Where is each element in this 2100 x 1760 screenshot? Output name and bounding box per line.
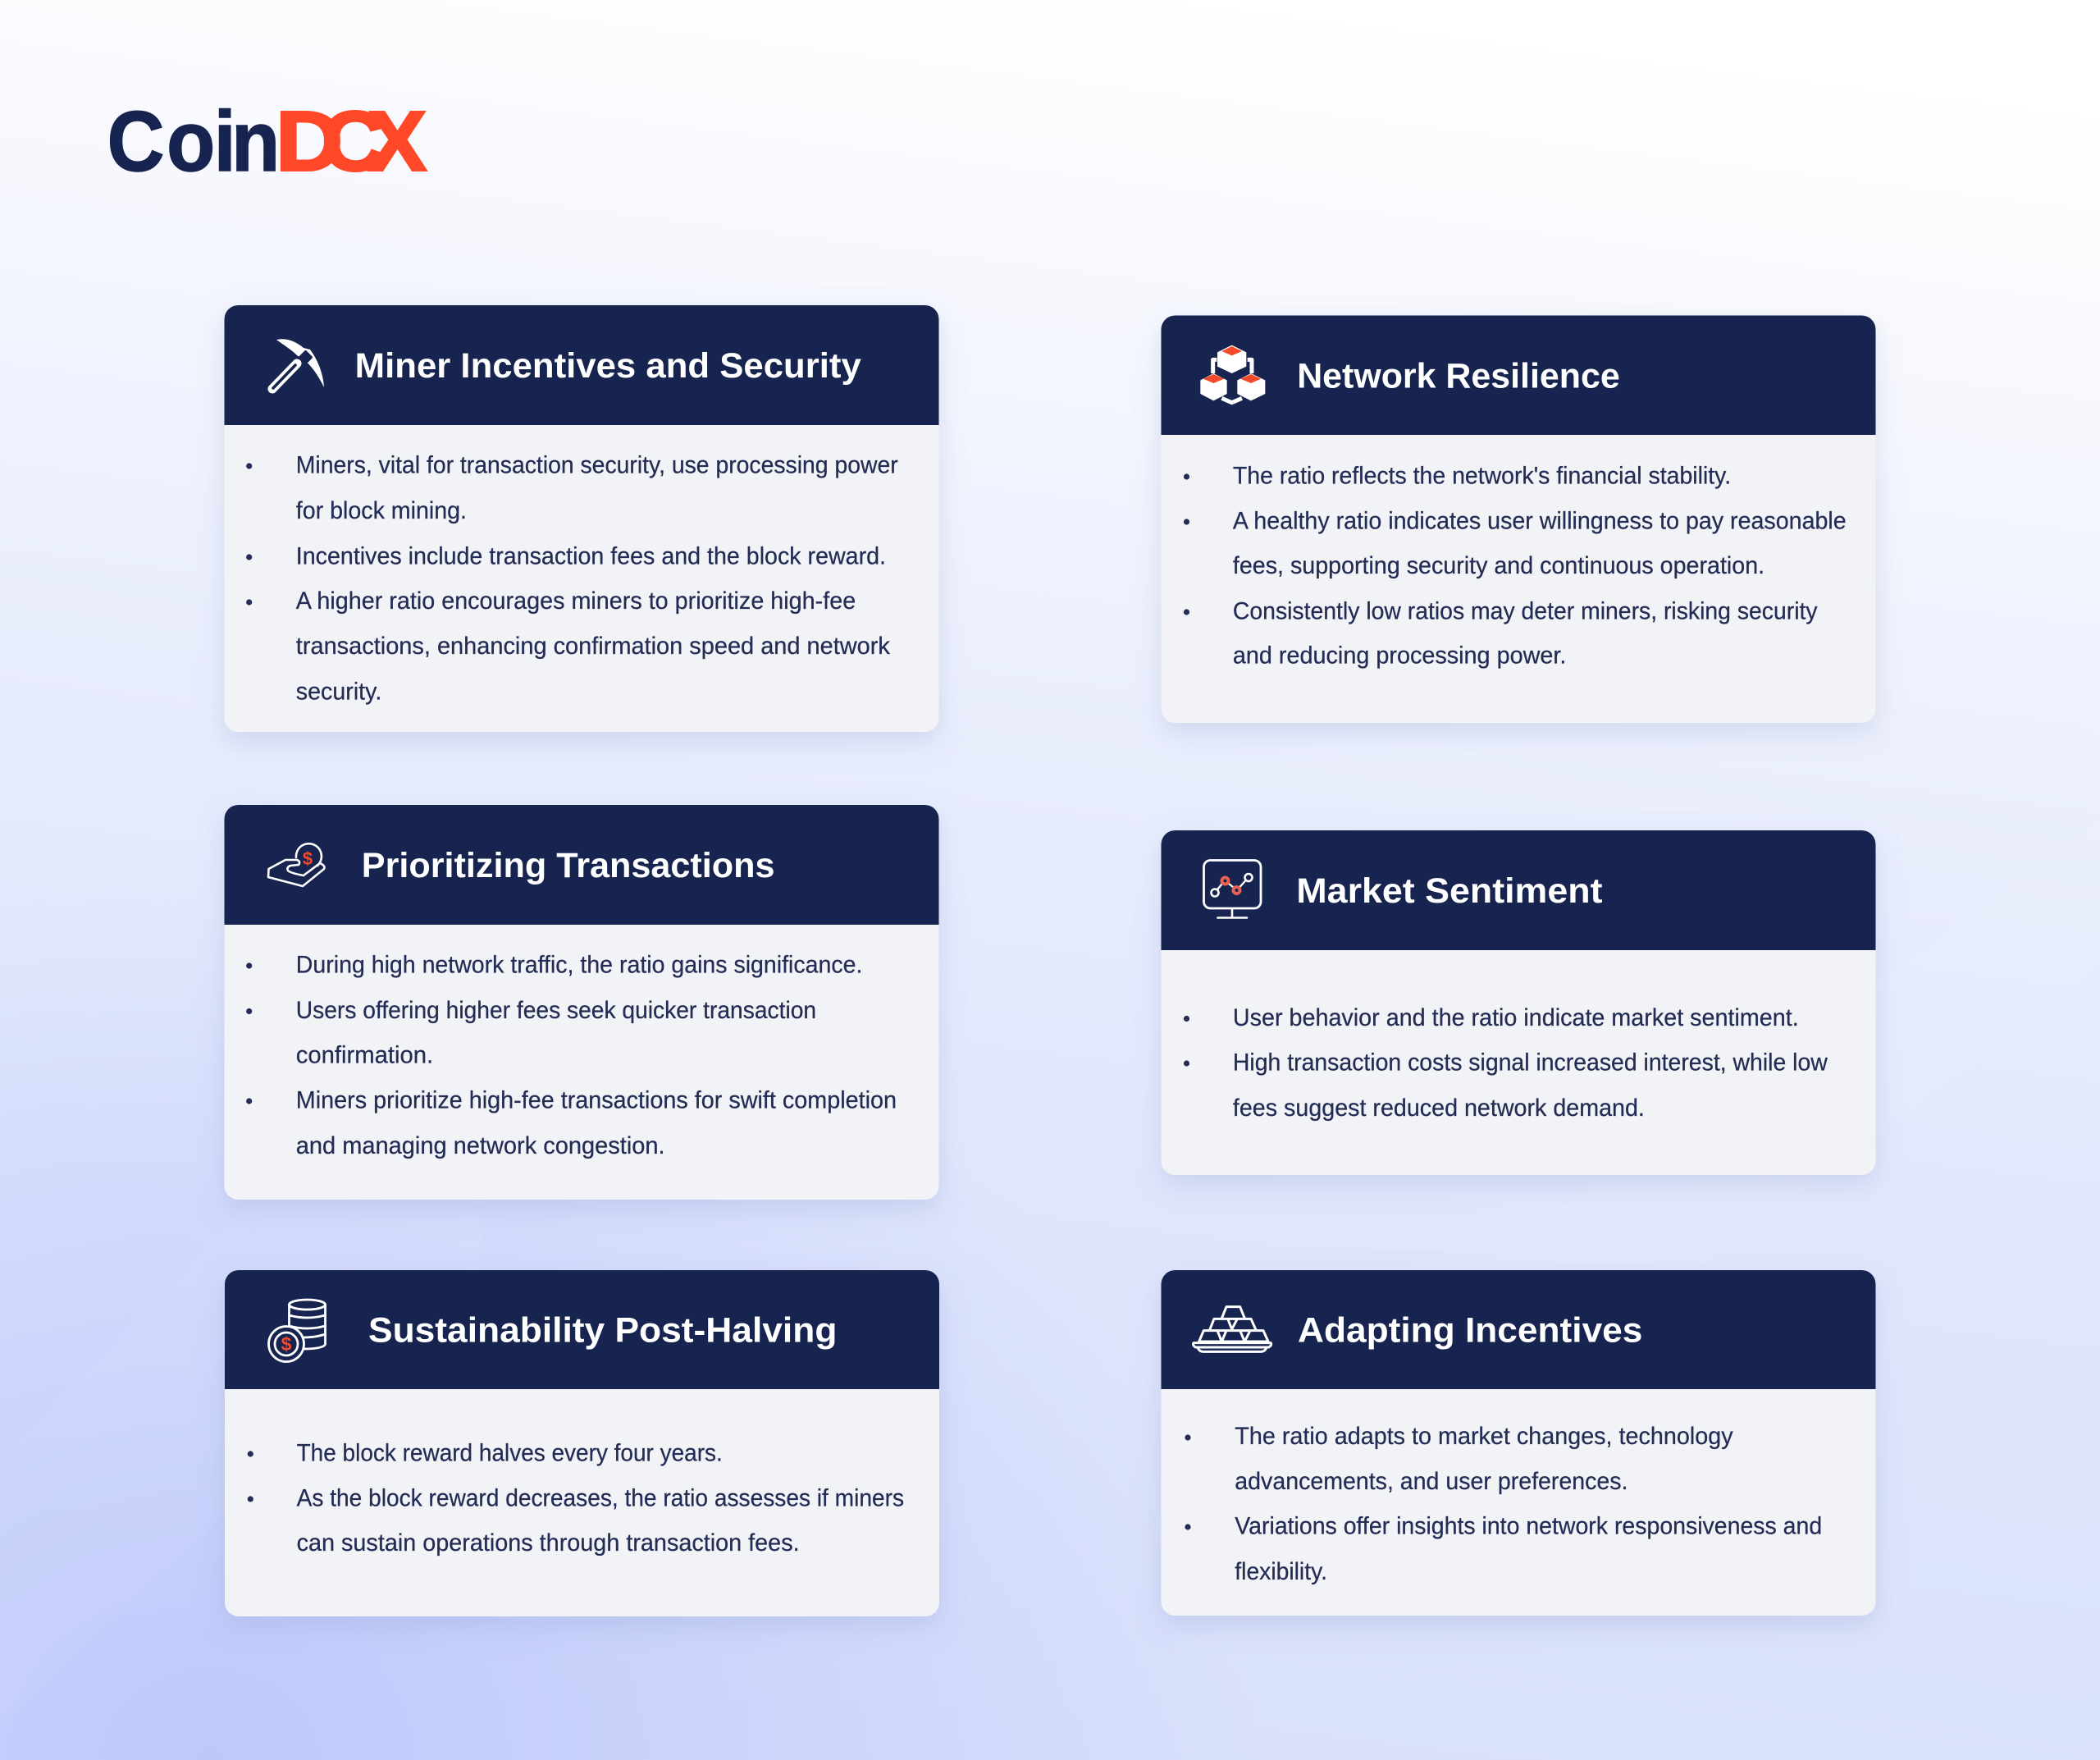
bullet list: A higher ratio encourages miners to prioritize high-fee xyxy=(296,587,856,615)
bullet list: A healthy ratio indicates user willingness to pay reasonable xyxy=(1233,507,1847,534)
logo: CoinDCX: C xyxy=(322,94,386,189)
bullet list: fees suggest reduced network demand. xyxy=(1233,1095,1645,1122)
panel: Sustainability Post-Halving xyxy=(225,1270,939,1616)
logo: CoinDCX: X xyxy=(368,94,427,189)
logo: CoinDCX: Coin xyxy=(107,94,280,190)
panel: Miner Incentives and Security xyxy=(225,305,938,732)
bullet list: Miners prioritize high-fee transactions for swift completion xyxy=(296,1086,897,1113)
bullet list xyxy=(248,1440,904,1557)
bullet list: for block mining. xyxy=(296,497,467,524)
logo: CoinDCX xyxy=(107,94,427,190)
bullet list: User behavior and the ratio indicate market sentiment. xyxy=(1233,1004,1799,1031)
icon: gold bars on tray xyxy=(1194,1307,1271,1351)
panel: Prioritizing Transactions xyxy=(225,805,938,1200)
heading: Miner Incentives and Security xyxy=(355,346,861,386)
icon: hand with coin xyxy=(268,843,324,886)
bullet list xyxy=(246,451,898,705)
bullet list: Incentives include transaction fees and the block reward. xyxy=(296,543,886,569)
bullet list: During high network traffic, the ratio gains significance. xyxy=(296,952,862,978)
bullet list xyxy=(1184,1004,1828,1122)
panel: Adapting Incentives xyxy=(1162,1270,1875,1616)
bullet list: High transaction costs signal increased interest, while low xyxy=(1233,1049,1828,1077)
panel: Network Resilience xyxy=(1162,315,1875,723)
bullet list: flexibility. xyxy=(1235,1558,1327,1585)
heading: Sustainability Post-Halving xyxy=(368,1311,837,1351)
icon: cubes xyxy=(1200,345,1265,403)
bullet list: Users offering higher fees seek quicker transaction xyxy=(296,997,816,1024)
icon: coin stack xyxy=(269,1300,325,1362)
bullet list: The block reward halves every four years. xyxy=(297,1440,723,1467)
bullet list: confirmation. xyxy=(296,1042,433,1069)
heading: Network Resilience xyxy=(1297,356,1620,395)
bullet list: Variations offer insights into network responsiveness and xyxy=(1235,1513,1822,1540)
bullet list xyxy=(1185,1423,1822,1585)
bullet list: The ratio reflects the network's financial stability. xyxy=(1233,463,1731,490)
panel: Market Sentiment xyxy=(1162,830,1875,1175)
icon: coin stack: $ xyxy=(281,1333,292,1355)
bullet list xyxy=(1184,463,1847,669)
heading: Prioritizing Transactions xyxy=(362,846,774,885)
bullet list: and managing network congestion. xyxy=(296,1132,665,1159)
bullet list: Miners, vital for transaction security, use processing power xyxy=(296,451,898,479)
heading: Adapting Incentives xyxy=(1298,1311,1642,1351)
bullet list: fees, supporting security and continuous operation. xyxy=(1233,552,1764,579)
bullet list: The ratio adapts to market changes, technology xyxy=(1235,1423,1733,1450)
bullet list: transactions, enhancing confirmation speed and network xyxy=(296,633,890,660)
icon: pickaxe xyxy=(272,339,324,389)
bullet list: Consistently low ratios may deter miners, risking security xyxy=(1233,597,1818,625)
bullet list: As the block reward decreases, the ratio assesses if miners xyxy=(297,1484,904,1511)
bullet list: can sustain operations through transaction fees. xyxy=(297,1529,800,1557)
icon: monitor chart xyxy=(1204,860,1261,917)
bullet list: and reducing processing power. xyxy=(1233,642,1566,669)
bullet list xyxy=(246,952,897,1159)
bullet list: security. xyxy=(296,678,381,705)
heading: Market Sentiment xyxy=(1296,871,1603,911)
icon: hand with coin: $ xyxy=(303,848,313,869)
bullet list: advancements, and user preferences. xyxy=(1235,1468,1628,1495)
logo: CoinDCX: D xyxy=(276,94,343,189)
